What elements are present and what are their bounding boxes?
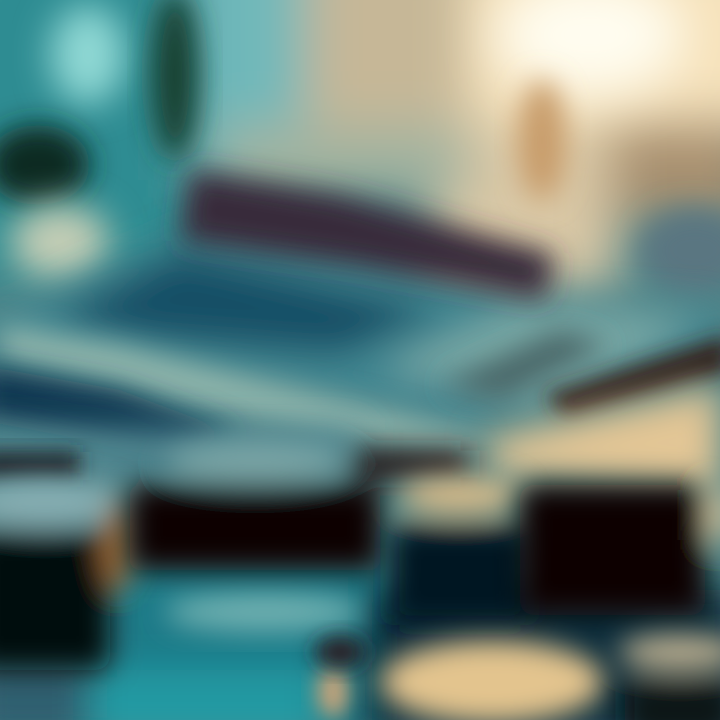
dark cup right: [520, 485, 720, 615]
plant stem: [151, 0, 199, 160]
bright window glow: [495, 0, 685, 95]
cream saucer: [380, 640, 604, 720]
small brown accent: [317, 666, 349, 718]
stacked papers: [165, 592, 365, 632]
warm desk surface: [0, 385, 720, 490]
laptop screen edge: [180, 170, 555, 300]
dark spot by saucer: [314, 636, 366, 668]
dark cup bottom right: [618, 634, 720, 720]
plant leaves: [0, 125, 90, 205]
light aqua window: [50, 5, 126, 105]
lower teal table: [0, 560, 720, 720]
laptop body: [0, 230, 720, 420]
background figure: [518, 80, 566, 200]
laptop keyboard detail: [440, 330, 610, 400]
dark strip behind left cup: [0, 452, 80, 480]
dark cup centre: [130, 442, 470, 570]
right side object: [640, 208, 720, 292]
dark cup left: [0, 479, 134, 670]
dark laptop underside: [0, 365, 240, 460]
desk edge highlight: [0, 325, 480, 465]
background wall: [0, 0, 720, 290]
dark cup mid-right: [390, 477, 530, 625]
dark diagonal stripe: [545, 335, 720, 420]
plant pot: [10, 204, 110, 280]
